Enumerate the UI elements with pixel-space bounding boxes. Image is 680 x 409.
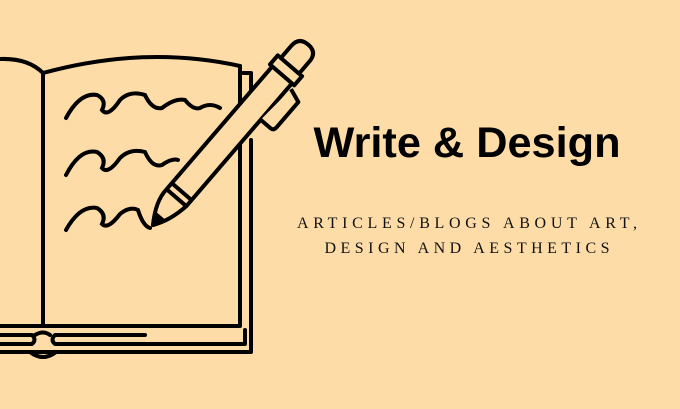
subtitle: DESIGN AND AESTHETICS bbox=[324, 240, 610, 257]
subtitle: ARTICLES/BLOGS ABOUT ART, bbox=[297, 215, 637, 232]
title: Write & Design bbox=[314, 119, 620, 167]
subtitle bbox=[297, 215, 637, 257]
squiggle text lines bbox=[66, 93, 220, 230]
icon: pen bbox=[141, 34, 331, 245]
icon: open book bbox=[0, 57, 251, 357]
